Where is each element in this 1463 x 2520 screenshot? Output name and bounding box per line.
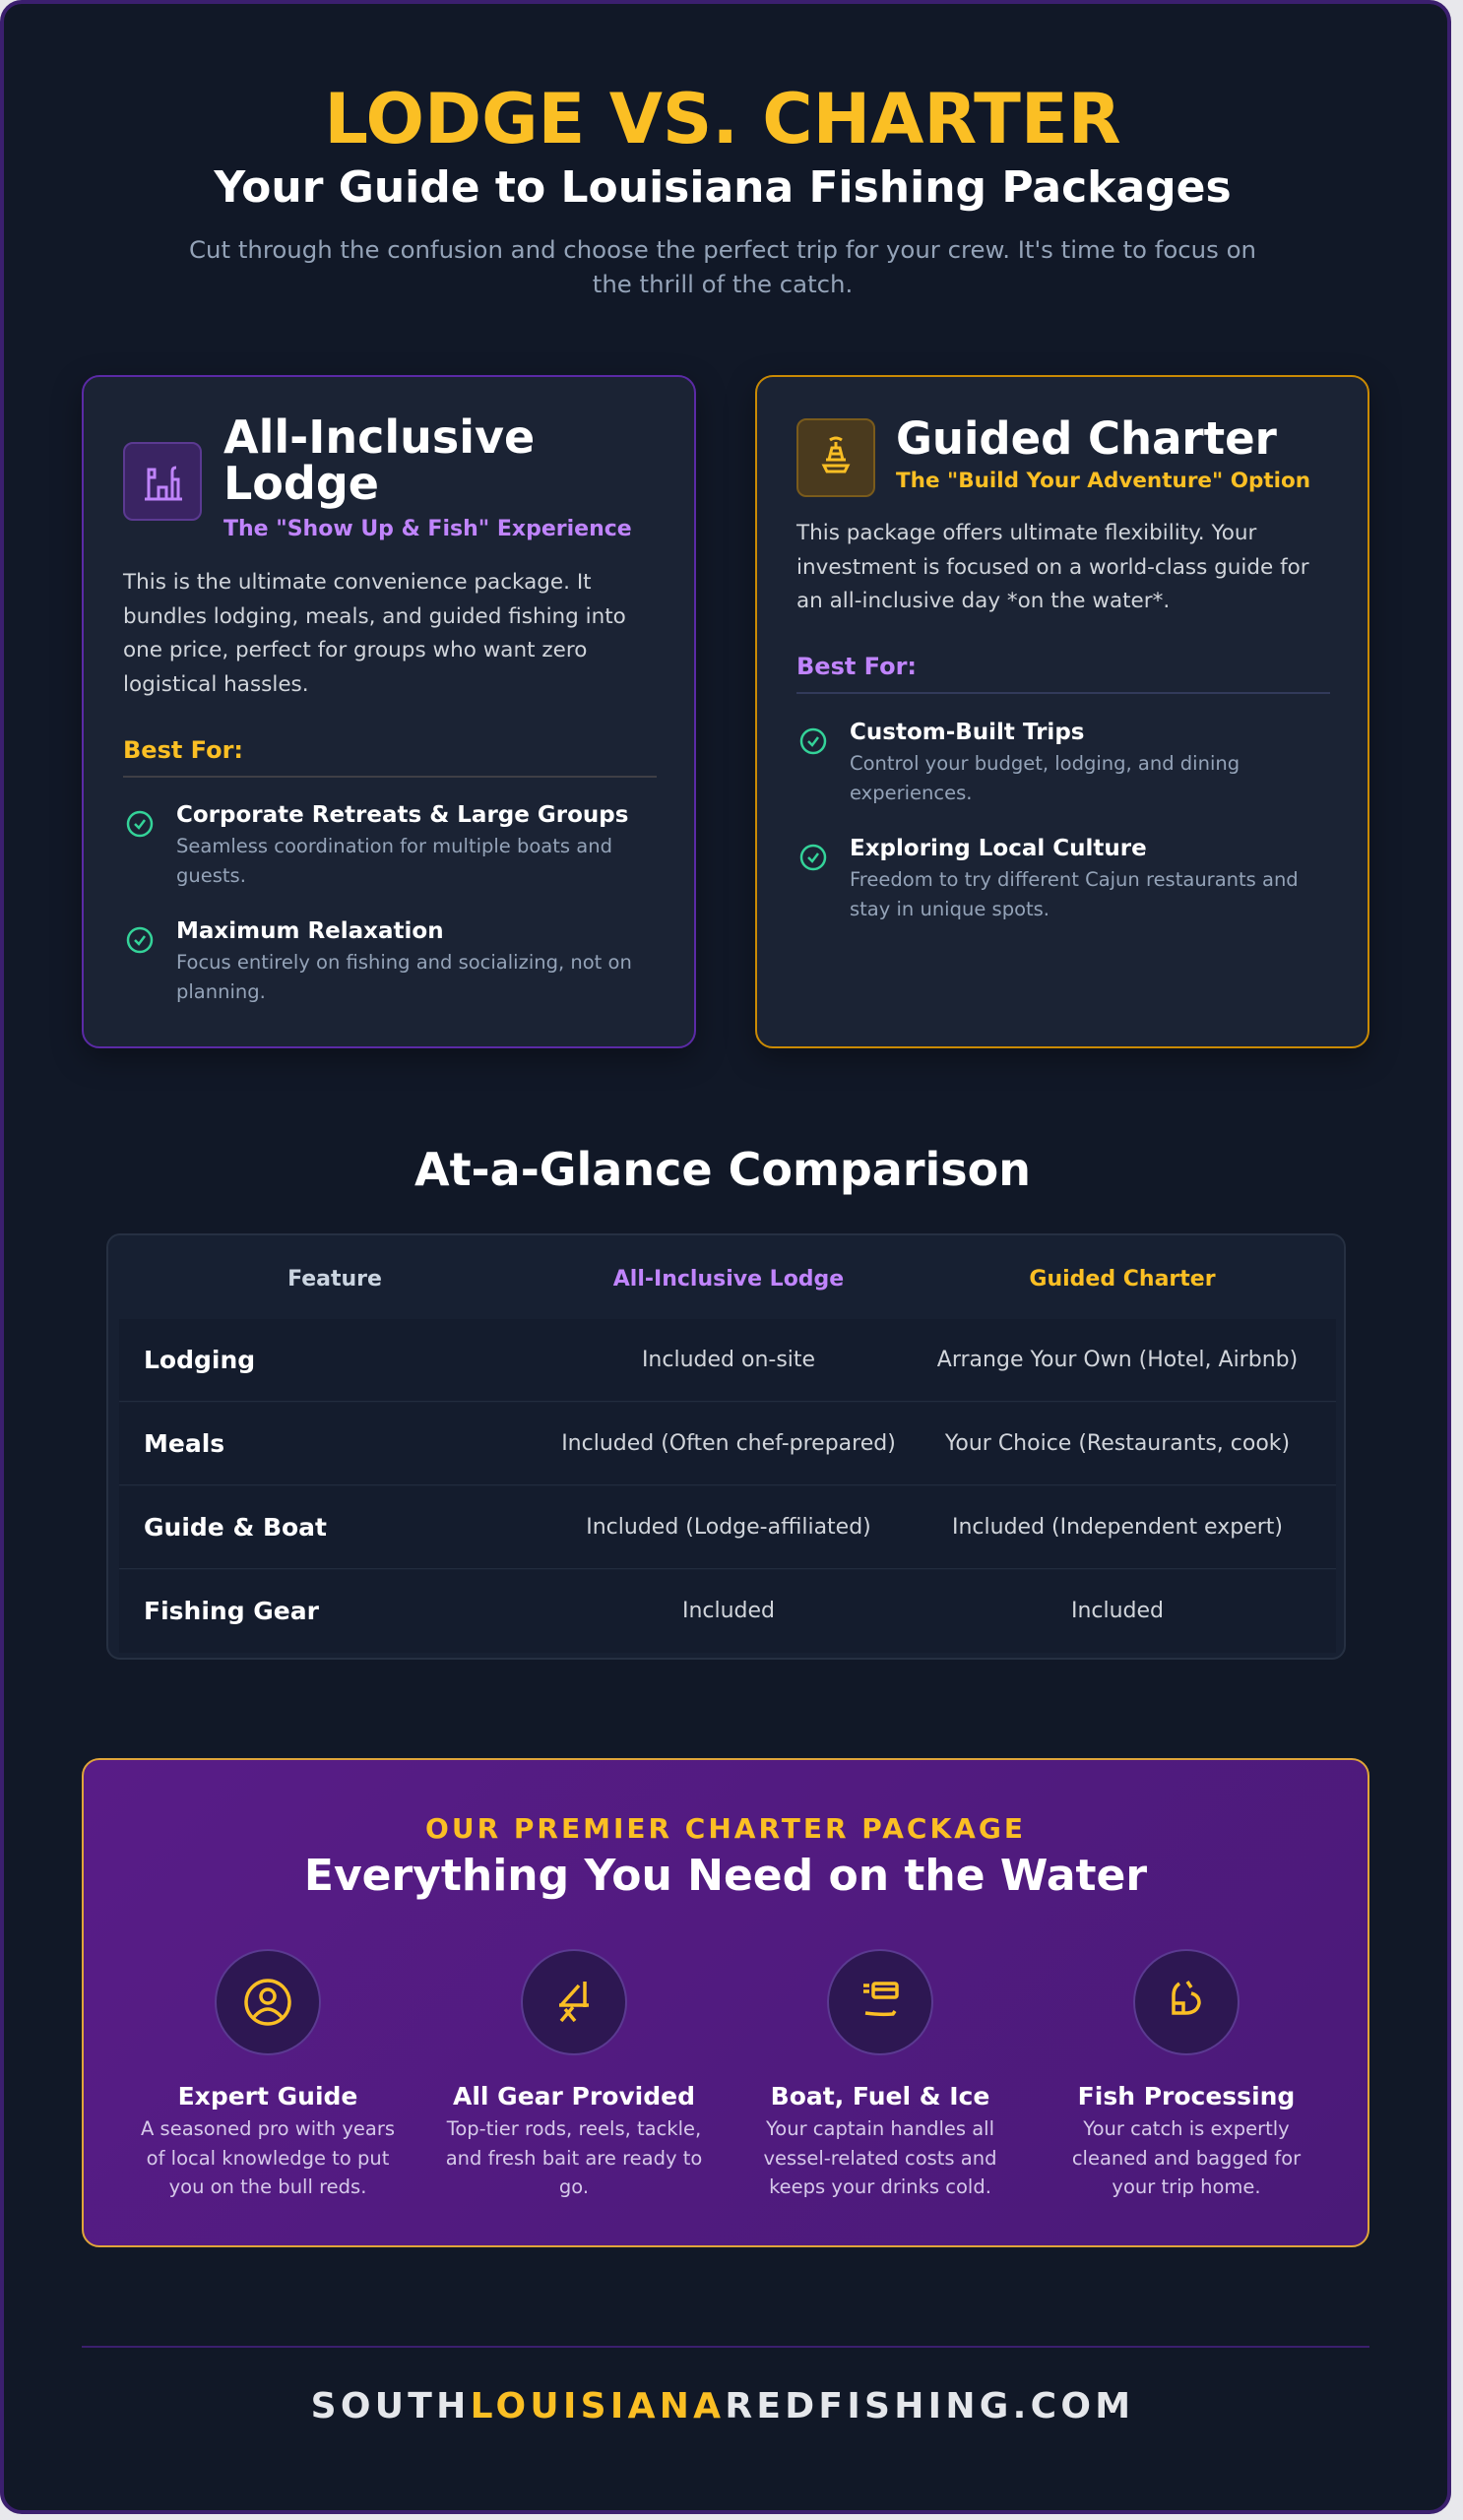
feature: fish processing: Your catch is expertly cleaned and bagged for your trip home. [1072,2117,1301,2198]
panel: guided charter [755,375,1369,1048]
table header: All-Inclusive Lodge [613,1267,844,1292]
row: fishing gear [119,1570,1336,1653]
row: guide & boat [119,1486,1336,1569]
feature: expert guide: Expert Guide [178,2082,357,2110]
feature: fish processing: Fish Processing [1078,2082,1295,2110]
item: local culture [799,836,1299,919]
table header: Guided Charter [1029,1267,1216,1292]
feature: fish processing [1072,1949,1302,2198]
best for heading: Best For: [796,653,917,680]
heading: Guided Charter [896,412,1277,465]
feature: all gear: All Gear Provided [453,2082,695,2110]
feature: all gear [446,1949,702,2198]
description: This is the ultimate convenience package. It bundles lodging, meals, and guided fishing into one price, perfect for groups who want zero logistical hassles. [123,570,626,697]
row: fishing gear: Included [1071,1599,1164,1623]
table header [287,1267,1216,1292]
row: lodging: Lodging [144,1346,255,1374]
subheading: The "Show Up & Fish" Experience [223,517,632,541]
best for heading: Best For: [123,736,243,764]
row: lodging: Arrange Your Own (Hotel, Airbnb) [937,1348,1298,1372]
row: lodging [119,1319,1336,1402]
heading: Everything You Need on the Water [304,1851,1147,1901]
row: fishing gear: Included [682,1599,775,1623]
row: guide & boat: Included (Lodge-affiliated) [586,1515,871,1540]
item: maximum relaxation [126,918,632,1002]
heading: All-Inclusive Lodge [223,410,535,510]
intro text: Cut through the confusion and choose the perfect trip for your crew. It's time to focus on the thrill of the catch. [189,235,1256,298]
item: corporate retreats: Corporate Retreats & Large Groups [176,802,628,828]
row: meals: Your Choice (Restaurants, cook) [945,1431,1290,1456]
item: local culture: Freedom to try different Cajun restaurants and stay in unique spots. [850,868,1299,919]
comparison heading: At-a-Glance Comparison [414,1143,1031,1196]
feature: expert guide [141,1949,395,2198]
row: lodging: Included on-site [642,1348,815,1372]
table header: Feature [287,1267,382,1292]
panel: all-inclusive lodge [82,375,696,1048]
comparison table [106,1233,1346,1660]
item: maximum relaxation: Focus entirely on fishing and socializing, not on planning. [176,951,632,1002]
feature: boat fuel ice: Your captain handles all vessel-related costs and keeps your drinks cold. [764,2117,996,2198]
row: meals [119,1403,1336,1485]
feature: all gear: Top-tier rods, reels, tackle, and fresh bait are ready to go. [446,2117,702,2198]
row: guide & boat: Included (Independent expert) [952,1515,1283,1540]
feature: boat fuel ice: Boat, Fuel & Ice [771,2082,989,2110]
eyebrow: OUR PREMIER CHARTER PACKAGE [425,1812,1026,1845]
feature: boat fuel ice [764,1949,996,2198]
item: custom-built trips: Control your budget, lodging, and dining experiences. [850,752,1240,803]
description: This package offers ultimate flexibility. Your investment is focused on a world-class guide for an all-inclusive day *on the water*. [796,521,1309,613]
row: meals: Meals [144,1429,224,1458]
icon: lodge [123,442,202,521]
item: custom-built trips [799,720,1240,803]
title: LODGE VS. CHARTER [324,79,1121,159]
item: corporate retreats: Seamless coordination for multiple boats and guests. [176,835,612,886]
row: meals: Included (Often chef-prepared) [561,1431,896,1456]
panel: premier charter package [82,1758,1369,2247]
item: custom-built trips: Custom-Built Trips [850,720,1084,745]
subheading: The "Build Your Adventure" Option [896,469,1310,493]
icon: charter [796,418,875,497]
feature: expert guide: A seasoned pro with years of local knowledge to put you on the bull reds. [141,2117,395,2198]
footer website: SOUTHLOUISIANAREDFISHING.COM [311,2386,1134,2426]
row: guide & boat: Guide & Boat [144,1513,327,1542]
item: corporate retreats [126,802,628,886]
row: fishing gear: Fishing Gear [144,1597,319,1625]
subtitle: Your Guide to Louisiana Fishing Packages [214,162,1232,213]
item: local culture: Exploring Local Culture [850,836,1147,861]
item: maximum relaxation: Maximum Relaxation [176,918,444,944]
